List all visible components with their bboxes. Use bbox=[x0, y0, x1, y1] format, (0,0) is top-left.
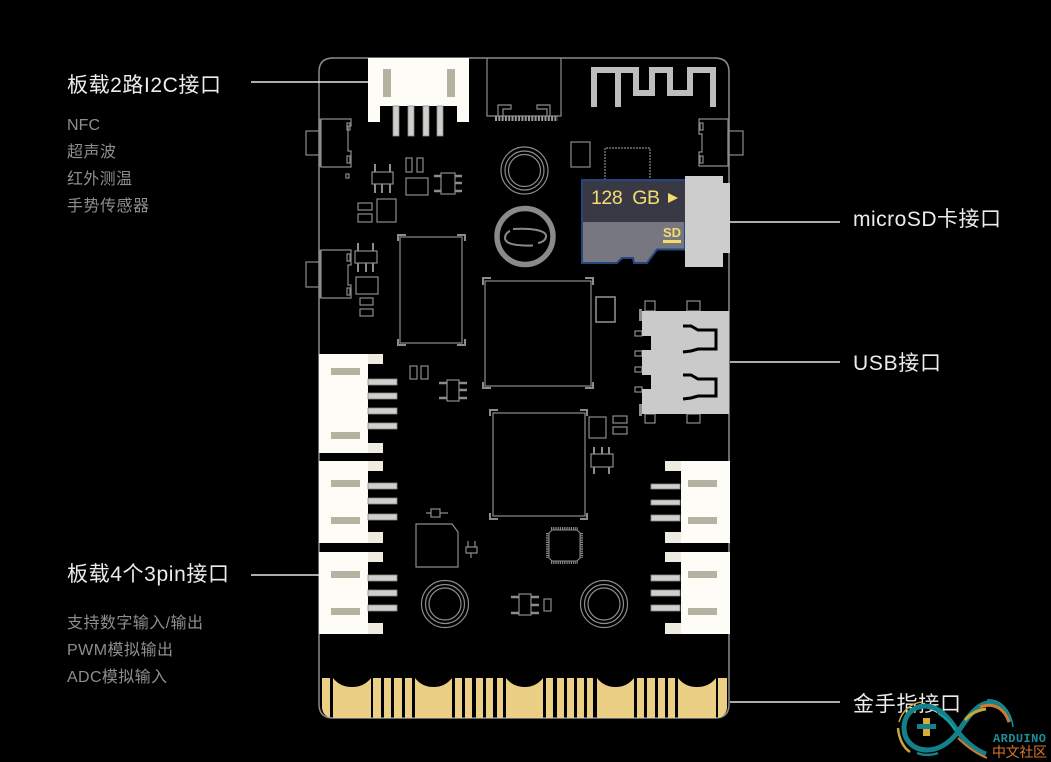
icon: mounting ring top bbox=[501, 147, 548, 194]
icon: left connector 1 bbox=[319, 354, 397, 453]
text block: I2C sensor list: NFC bbox=[67, 117, 100, 134]
text block: I2C sensor list: 手势传感器 bbox=[67, 197, 149, 215]
icon: small SMD parts upper left bbox=[355, 158, 462, 316]
text: Chinese community wordmark: 中文社区 bbox=[992, 744, 1047, 760]
text block: 3pin functions: ADC模拟输入 bbox=[67, 668, 167, 686]
text block: I2C sensor list bbox=[67, 117, 149, 215]
text block: 3pin functions bbox=[67, 614, 203, 686]
icon: PCB antenna bbox=[594, 70, 713, 107]
text block: I2C sensor list: 红外测温 bbox=[67, 170, 132, 188]
heading: 3pin connector: 板载4个3pin接口 bbox=[67, 563, 229, 586]
icon: USB-C outline bbox=[487, 58, 561, 118]
heading: microSD slot: microSD卡接口 bbox=[853, 208, 1001, 231]
icon: component pad above SD bbox=[571, 142, 590, 167]
icon: plus sign bbox=[917, 718, 936, 736]
text: ARDUINO wordmark: ARDUINO bbox=[993, 732, 1046, 746]
icon: right connector 2 bbox=[651, 552, 730, 634]
panel: circuit board outline bbox=[319, 58, 729, 718]
icon: round logo bbox=[497, 208, 553, 264]
icon: infinity teal band bbox=[904, 703, 1010, 750]
icon: left connector 2 bbox=[319, 461, 397, 543]
icon: dashed box above SD bbox=[605, 148, 650, 180]
icon: mounting rings bottom bbox=[422, 580, 628, 628]
icon: chip outline 1 bbox=[398, 235, 465, 345]
icon: inner accent arcs bbox=[898, 728, 910, 752]
panel: left I2C label block bbox=[67, 74, 221, 215]
icon: left connector 3 bbox=[319, 552, 397, 634]
icon: play triangle bbox=[668, 193, 678, 203]
icon: SD socket bbox=[685, 176, 730, 267]
icon: USB port bbox=[635, 301, 729, 423]
icon: small SMD parts centre bbox=[410, 297, 627, 615]
icon: right connector 1 bbox=[651, 461, 730, 543]
heading: gold finger: 金手指接口 bbox=[853, 693, 961, 716]
arrow: leader lines bbox=[251, 82, 840, 702]
text: SD mark: SD bbox=[663, 225, 681, 240]
heading: I2C connector: 板载2路I2C接口 bbox=[67, 74, 221, 97]
icon: chip outline 3 bbox=[490, 410, 587, 519]
text block: 3pin functions: PWM模拟输出 bbox=[67, 641, 173, 659]
icon: left side buttons bbox=[306, 119, 351, 298]
panel: left 3pin label block bbox=[67, 563, 229, 686]
icon: QFP chip bbox=[548, 528, 582, 562]
icon: right side button bbox=[699, 119, 743, 166]
text: capacity: 128 GB bbox=[591, 187, 660, 209]
text block: 3pin functions: 支持数字输入/输出 bbox=[67, 614, 203, 632]
icon: gold fingers bbox=[322, 678, 727, 718]
heading: USB port: USB接口 bbox=[853, 352, 941, 375]
icon: SD card bbox=[582, 180, 685, 263]
icon: Arduino community logo bbox=[898, 700, 1013, 758]
icon: chip outline 2 bbox=[483, 278, 593, 388]
icon: I2C connector bbox=[368, 58, 469, 136]
text block: I2C sensor list: 超声波 bbox=[67, 143, 116, 161]
